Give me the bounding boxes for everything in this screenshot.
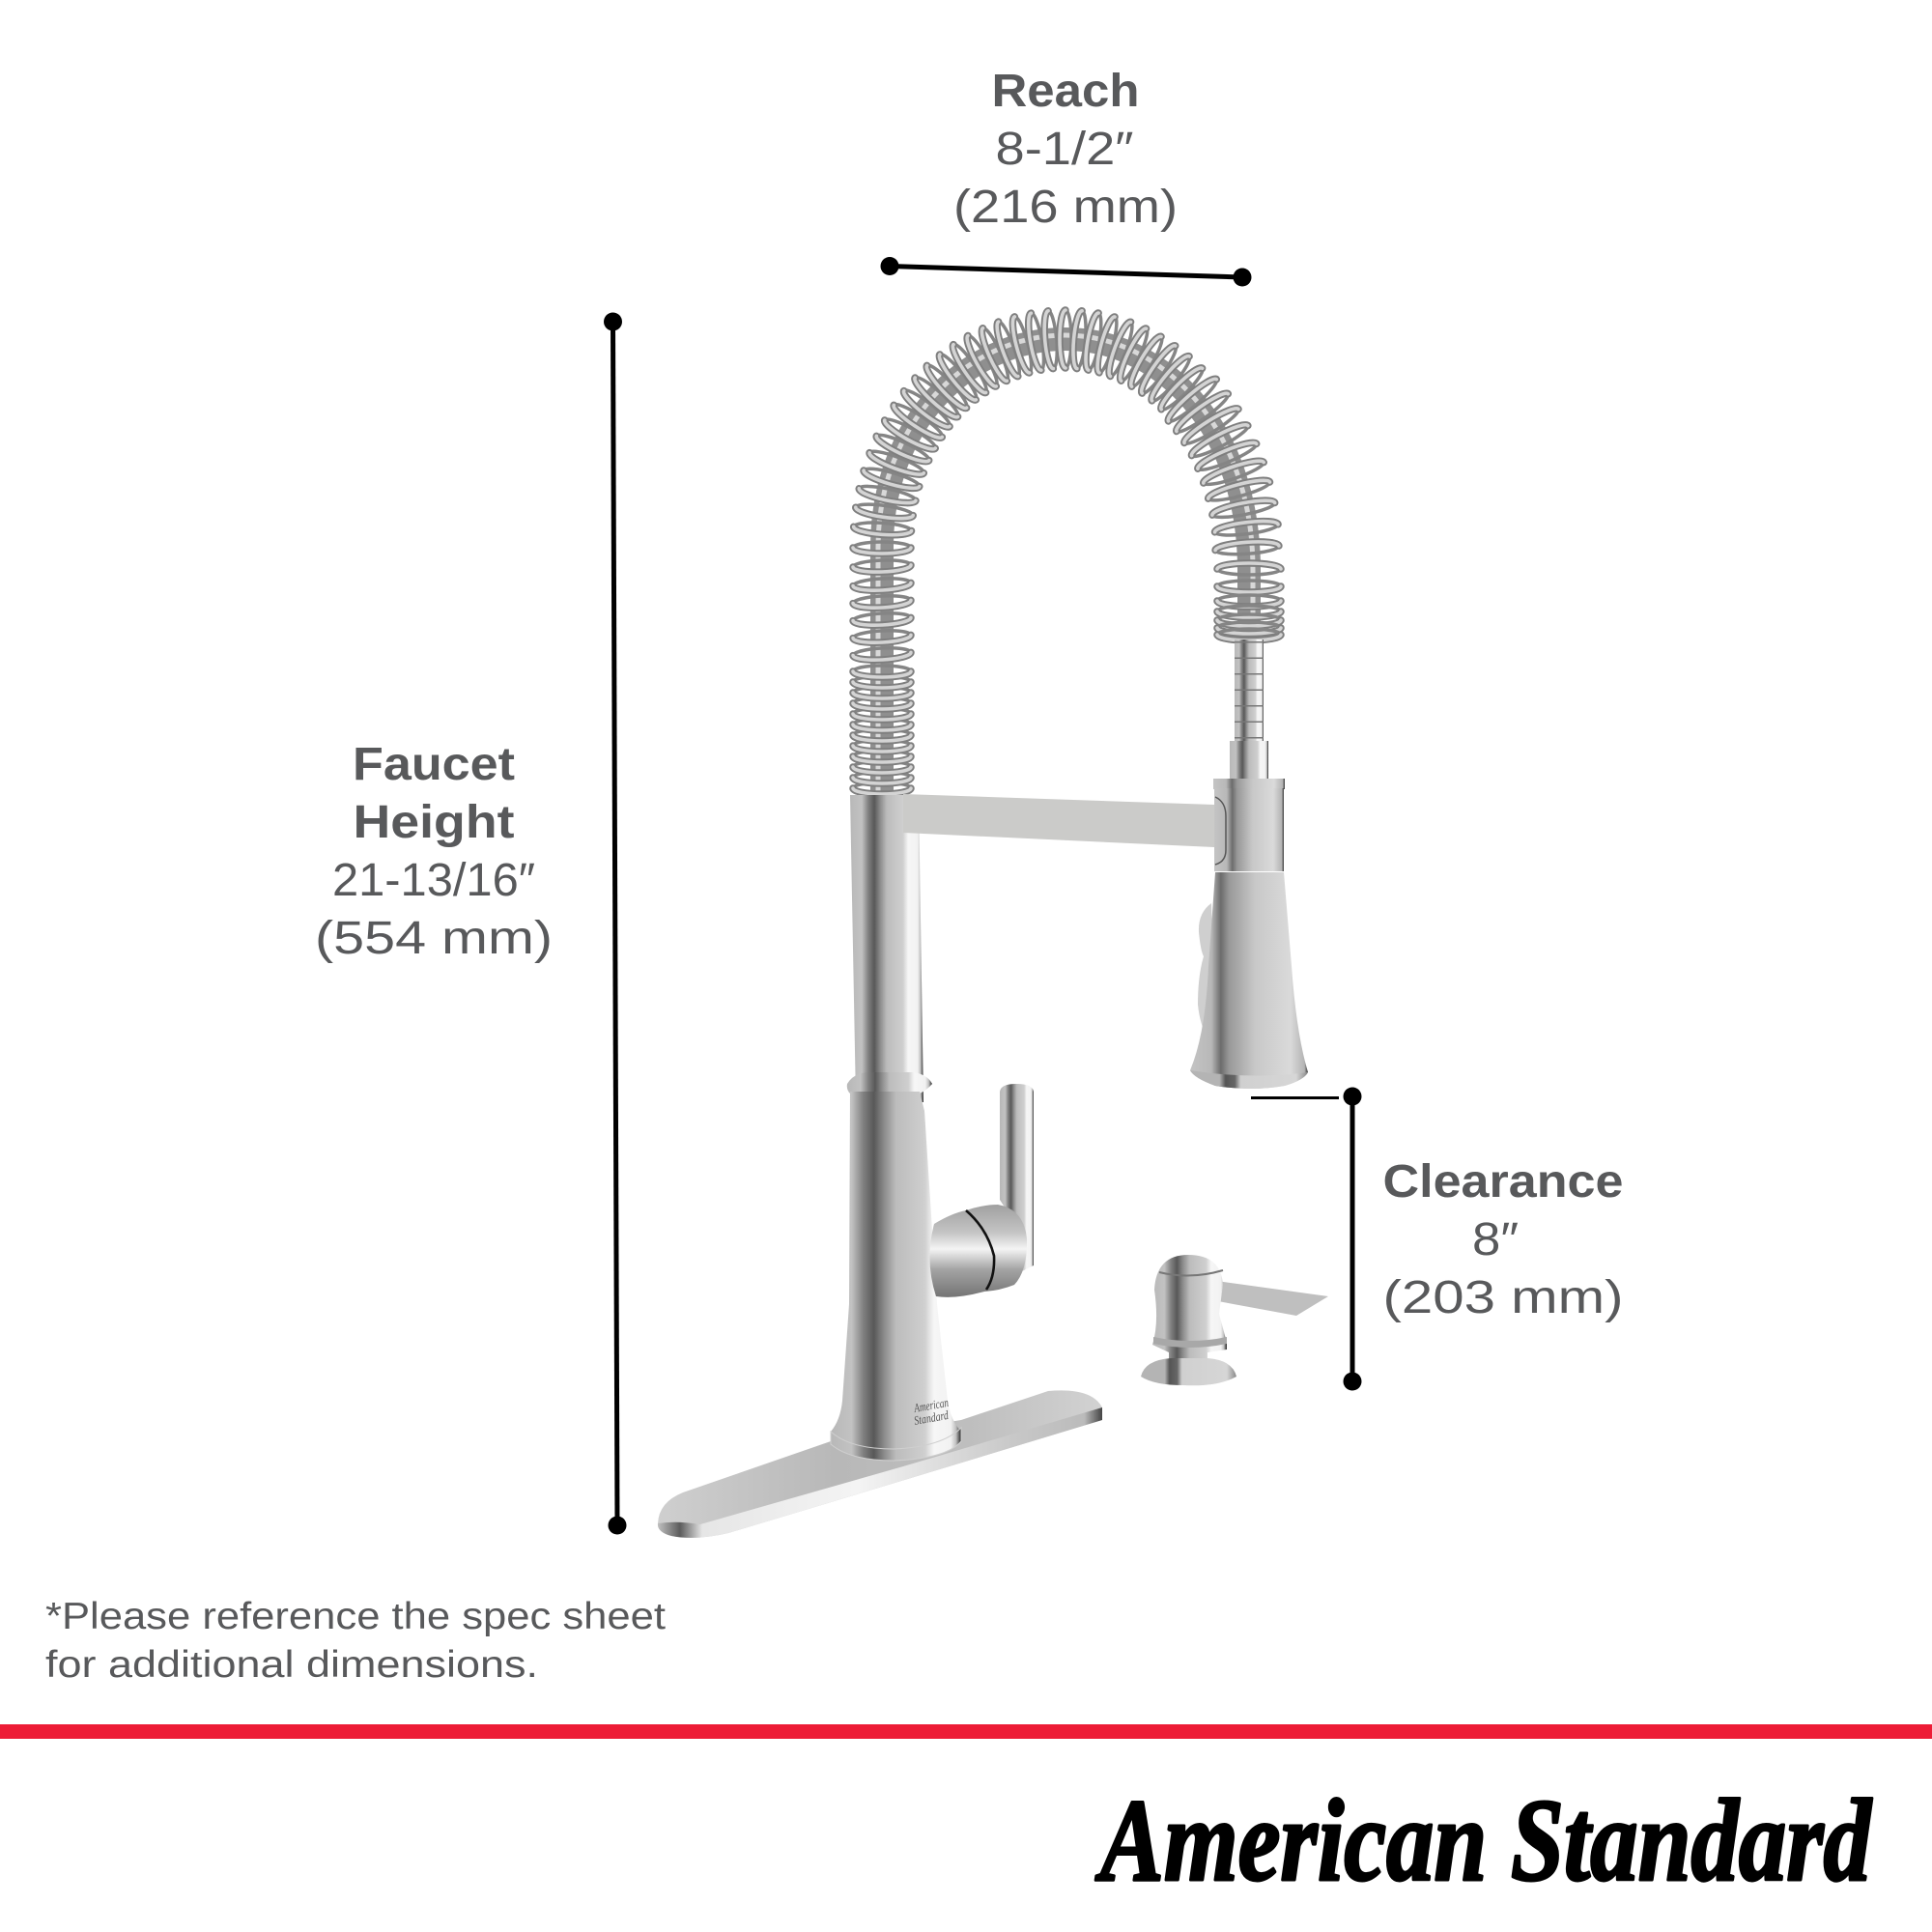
clearance heading and values: (203 mm) [1383, 1272, 1623, 1323]
hub seam [966, 1210, 994, 1290]
faucet illustration [658, 310, 1328, 1538]
dispenser base [1141, 1358, 1236, 1385]
clearance heading and values: Clearance [1383, 1156, 1623, 1208]
clearance heading and values: 8″ [1472, 1214, 1519, 1265]
logo on body: Standard [913, 1407, 950, 1428]
base collar ring [831, 1428, 961, 1461]
faucet height dimension line [604, 313, 626, 1534]
handle hub [929, 1205, 1027, 1297]
reach heading and values [953, 66, 1178, 233]
cover plate [658, 1390, 1102, 1538]
faucet height heading and values: 21-13/16″ [332, 855, 535, 906]
reach dimension line [881, 257, 1252, 286]
reach heading and values: (216 mm) [953, 182, 1178, 233]
logo on body: American [912, 1395, 950, 1415]
lower body [831, 1092, 961, 1461]
flexible hose [1235, 639, 1264, 742]
crossbar arm [903, 794, 1214, 847]
clearance heading and values [1383, 1156, 1623, 1323]
logo on body [912, 1395, 950, 1428]
dispenser ring [1153, 1337, 1227, 1348]
faucet height heading and values [315, 739, 553, 964]
reach heading and values: 8-1/2″ [995, 124, 1134, 175]
plate front edge [658, 1407, 1102, 1538]
footnote: *Please reference the spec sheet [45, 1596, 666, 1637]
reach heading and values: Reach [991, 66, 1140, 117]
spray head flare [1190, 872, 1308, 1089]
coil spring [853, 310, 1281, 794]
dispenser pump spout [1208, 1280, 1328, 1316]
column collar ring [847, 1072, 932, 1094]
spray head trigger [1198, 903, 1215, 1038]
faucet height heading and values: (554 mm) [315, 913, 553, 964]
footnote: for additional dimensions. [45, 1644, 538, 1686]
spray head upper cylinder [1214, 788, 1284, 871]
spray head cap [1213, 779, 1285, 789]
spring inner hose [878, 335, 1253, 792]
dispenser body [1152, 1255, 1227, 1362]
faucet height heading and values: Height [354, 797, 515, 848]
footnote [45, 1596, 666, 1686]
hose collar [1230, 741, 1268, 781]
soap dispenser [1141, 1255, 1328, 1385]
handle lever [1000, 1084, 1034, 1271]
spray head button outline [1215, 797, 1226, 865]
red divider bar [0, 1724, 1932, 1739]
faucet height heading and values: Faucet [353, 739, 515, 790]
dispenser collar line [1159, 1270, 1223, 1276]
clearance tick and dimension line [1251, 1088, 1362, 1391]
upper column [850, 795, 923, 1102]
spray head lip [1190, 1070, 1308, 1089]
